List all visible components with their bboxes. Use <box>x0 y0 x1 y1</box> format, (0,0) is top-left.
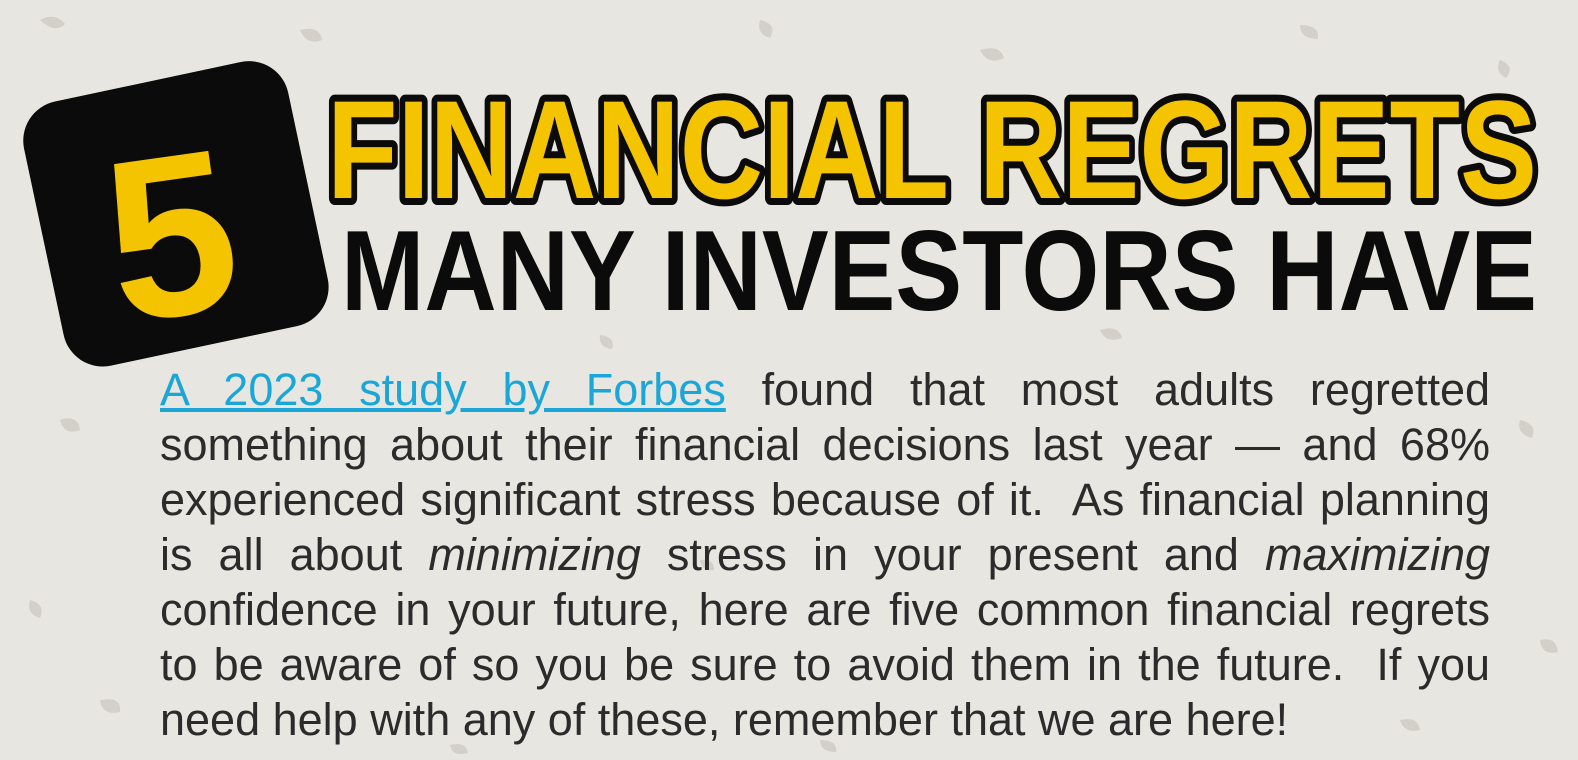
intro paragraph: need help with any of these, remember that we are here! <box>160 694 1288 745</box>
title <box>327 71 1538 330</box>
intro paragraph: something about their financial decisions last year — and 68% <box>160 419 1490 470</box>
intro paragraph: confidence in your future, here are five common financial regrets <box>160 584 1490 635</box>
intro paragraph <box>160 364 1490 745</box>
badge: number 5: 5 <box>90 99 253 372</box>
intro paragraph: experienced significant stress because of it. As financial planning <box>160 474 1490 525</box>
badge: number 5 <box>23 61 329 372</box>
intro paragraph: A 2023 study by Forbes found that most adults regretted <box>160 364 1490 415</box>
intro paragraph: to be aware of so you be sure to avoid them in the future. If you <box>160 639 1490 690</box>
intro paragraph: is all about minimizing stress in your present and maximizing <box>160 529 1490 580</box>
